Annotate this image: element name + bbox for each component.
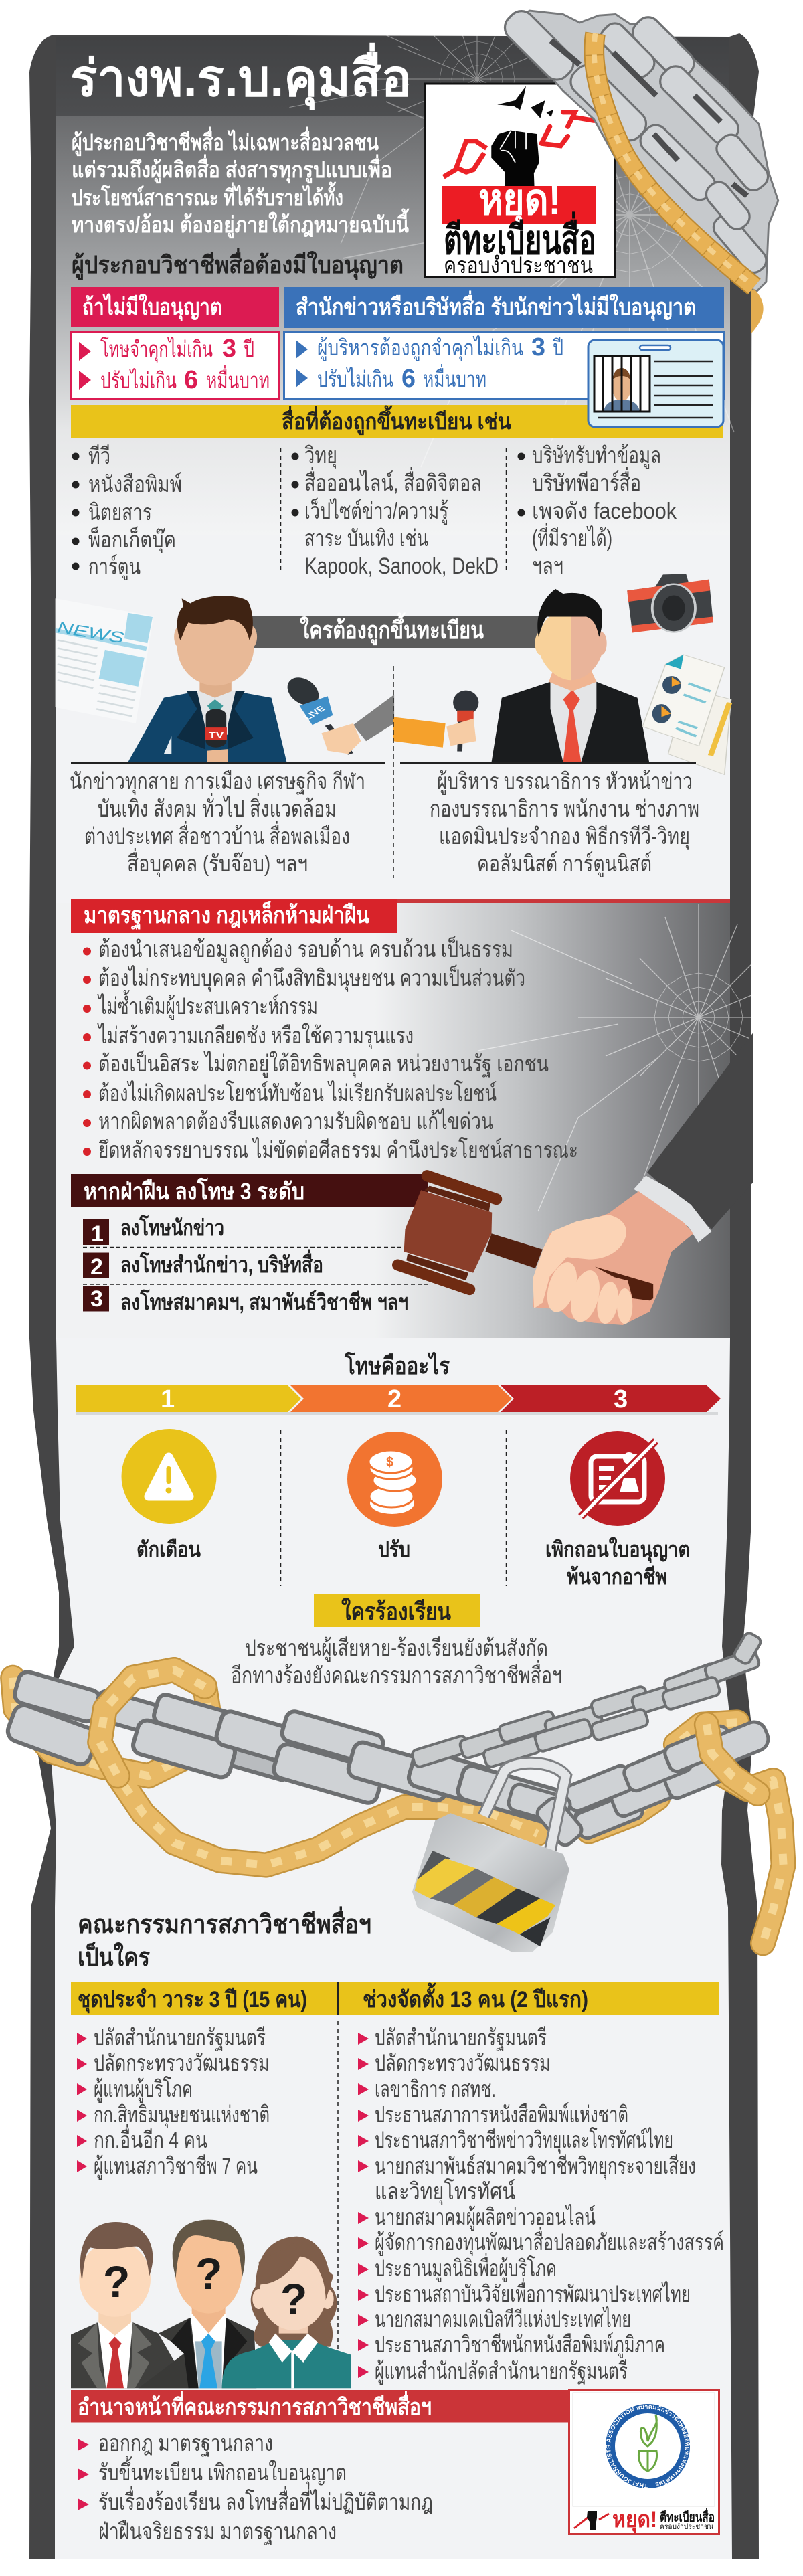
duties list: ฝ่าฝืนจริยธรรม มาตรฐานกลาง <box>98 2519 337 2545</box>
text: who executives <box>430 769 699 877</box>
who can complain: อีกทางร้องยังคณะกรรมการสภาวิชาชีพสื่อฯ <box>231 1660 562 1689</box>
panel upper gradient <box>56 116 730 535</box>
penalty levels list: 1 <box>91 1221 104 1247</box>
yellow bar: media to register: สื่อที่ต้องถูกขึ้นทะเบียน เช่น <box>282 405 511 436</box>
icon: licence revoked <box>570 1431 665 1526</box>
panel: no licence: 6 <box>184 366 198 394</box>
founding members list: ประธานสภาวิชาชีพนักหนังสือพิมพ์ภูมิภาค <box>375 2332 665 2358</box>
permanent members list <box>77 2025 270 2180</box>
panel: agency without licence: หมื่นบาท <box>423 364 486 392</box>
media lists: สื่อออนไลน์, สื่อดิจิตอล <box>304 467 482 496</box>
penalty levels list: ลงโทษนักข่าว <box>120 1215 224 1240</box>
permanent members list: ผู้แทนสภาวิชาชีพ 7 คน <box>94 2154 258 2180</box>
penalty labels: ปรับ <box>378 1537 410 1561</box>
dashed dividers <box>281 1430 506 1586</box>
panel: no licence: หมื่นบาท <box>206 365 270 393</box>
media lists: สาระ บันเทิง เช่น <box>304 526 428 551</box>
founding members list: นายกสมาคมผู้ผลิตข่าวออนไลน์ <box>375 2204 596 2231</box>
text: who executives: กองบรรณาธิการ พนักงาน ช่างภาพ <box>430 796 699 822</box>
cracked glass top <box>289 0 574 244</box>
media lists: บริษัทรับทำข้อมูล <box>532 443 661 469</box>
permanent members list: ปลัดสำนักนายกรัฐมนตรี <box>94 2025 266 2051</box>
grey gradient behind rules section <box>56 903 730 1338</box>
penalty step arrows: 3 <box>614 1385 628 1413</box>
permanent members list: กก.สิทธิมนุษยชนแห่งชาติ <box>94 2102 270 2128</box>
founding members list: ปลัดสำนักนายกรัฐมนตรี <box>375 2025 547 2051</box>
media lists: หนังสือพิมพ์ <box>88 472 182 497</box>
maroon header: three penalty levels: หากฝ่าฝืน ลงโทษ 3 ระดับ <box>84 1177 304 1205</box>
second rope strand over chain <box>100 1670 757 1794</box>
media lists: พ็อกเก็ตบุ๊ค <box>88 526 176 553</box>
founding members list <box>358 2025 724 2385</box>
permanent members list: ผู้แทนผู้บริโภค <box>94 2076 193 2103</box>
penalty levels list: ลงโทษสำนักข่าว, บริษัทสื่อ <box>120 1249 323 1277</box>
illustration: three unknown people <box>71 2220 351 2388</box>
illustration: report documents <box>642 655 731 774</box>
maroon header: three penalty levels <box>71 1174 428 1207</box>
penalty levels list: ลงโทษสมาคมฯ, สมาพันธ์วิชาชีพ ฯลฯ <box>120 1289 408 1314</box>
rules list: ต้องเป็นอิสระ ไม่ตกอยู่ใต้อิทธิพลบุคคล หน่วยงานรัฐ เอกชน <box>98 1050 549 1078</box>
padlock <box>412 1763 569 1952</box>
who must register heading: ใครต้องถูกขึ้นทะเบียน <box>300 612 484 646</box>
text: who executives: ผู้บริหาร บรรณาธิการ หัวหน้าข่าว <box>437 769 693 795</box>
rope around lock <box>13 1670 784 1943</box>
illustration: newspaper: NEWS <box>54 619 128 647</box>
penalty labels <box>137 1537 690 1589</box>
illustration: live microphone <box>282 675 394 754</box>
duties header: อำนาจหน้าที่คณะกรรมการสภาวิชาชีพสื่อฯ <box>78 2391 432 2420</box>
rules list: ไม่ซ้ำเติมผู้ประสบเคราะห์กรรม <box>97 990 318 1020</box>
who can complain: ใครร้องเรียน <box>341 1597 451 1625</box>
founding members list: ประธานสภาการหนังสือพิมพ์แห่งชาติ <box>375 2102 628 2128</box>
licence heading: ผู้ประกอบวิชาชีพสื่อต้องมีใบอนุญาต <box>72 248 404 280</box>
intro paragraph <box>72 126 410 239</box>
who can complain <box>231 1594 562 1689</box>
rules list: ยึดหลักจรรยาบรรณ ไม่ขัดต่อศีลธรรม คำนึงประโยชน์สาธารณะ <box>98 1137 578 1163</box>
reporter and executive divider lines <box>71 762 696 764</box>
duties list <box>78 2431 433 2545</box>
text: who reporters: นักข่าวทุกสาย การเมือง เศรษฐกิจ กีฬา <box>70 769 365 795</box>
text: who reporters: สื่อบุคคล (รับจ๊อบ) ฯลฯ <box>127 848 308 877</box>
penalty levels list: 2 <box>90 1254 103 1280</box>
media lists: วิทยุ <box>304 443 337 469</box>
illustration: newspaper <box>54 598 154 723</box>
icon: warning <box>122 1429 217 1524</box>
text: who reporters: บันเทิง สังคม ทั่วไป สิ่งแวดล้อม <box>98 793 337 822</box>
panel: no licence: ปรับไม่เกิน <box>100 368 177 393</box>
panel: agency without licence: 6 <box>402 365 416 393</box>
panel: no licence: 3 <box>222 335 236 363</box>
permanent members list: กก.อื่นอีก 4 คน <box>94 2124 207 2153</box>
rules list: ไม่สร้างความเกลียดชัง หรือใช้ความรุนแรง <box>97 1023 414 1049</box>
media lists: เว็ปไซต์ข่าว/ความรู้ <box>304 497 448 525</box>
duties list: ออกกฎ มาตรฐานกลาง <box>98 2431 273 2457</box>
panel: no licence <box>71 287 279 399</box>
dashed divider <box>337 2021 339 2349</box>
poster: stop media registration: ตีทะเบียนสื่อ <box>444 211 596 262</box>
penalty levels list <box>83 1215 428 1314</box>
icon: coins <box>347 1432 442 1527</box>
mini stop logo: ตีทะเบียนสื่อ <box>660 2507 715 2525</box>
who can complain: ประชาชนผู้เสียหาย-ร้องเรียนยังต้นสังกัด <box>245 1636 548 1662</box>
permanent members list: ปลัดกระทรวงวัฒนธรรม <box>94 2051 270 2076</box>
duties header <box>71 2390 569 2423</box>
panel: no licence: ปี <box>243 337 254 361</box>
red header: central standards <box>71 899 730 933</box>
media lists: การ์ตูน <box>88 554 141 580</box>
panel: agency without licence: ปี <box>552 335 563 360</box>
illustration: TV reporter: TV <box>209 730 224 740</box>
illustration: camera <box>627 574 713 632</box>
media lists <box>72 443 677 580</box>
rules list: ต้องไม่เกิดผลประโยชน์ทับซ้อน ไม่เรียกรับผลประโยชน์ <box>98 1080 497 1106</box>
illustration: sleeve and hand <box>485 1033 753 1325</box>
panel: no licence: ถ้าไม่มีใบอนุญาต <box>82 293 222 321</box>
cracked glass upper right <box>343 67 778 467</box>
intro paragraph: แต่รวมถึงผู้ผลิตสื่อ ส่งสารทุกรูปแบบเพื่อ <box>72 154 392 184</box>
panel: no licence: โทษจำคุกไม่เกิน <box>100 337 213 363</box>
title band top gradient <box>56 37 729 117</box>
rules list: ต้องนำเสนอข้อมูลถูกต้อง รอบด้าน ครบถ้วน เป็นธรรม <box>98 936 513 963</box>
media lists: (ที่มีรายได้) <box>532 523 612 551</box>
media lists: ฯลฯ <box>532 553 563 579</box>
rope top right <box>594 33 764 333</box>
penalty levels list: 3 <box>90 1286 103 1312</box>
chain: left run <box>5 1670 582 1830</box>
panel: agency without licence: ปรับไม่เกิน <box>317 367 393 392</box>
panel: agency without licence <box>284 287 724 399</box>
committee heading <box>78 1906 371 1972</box>
text: who reporters: ต่างประเทศ สื่อชาวบ้าน สื่อพลเมือง <box>84 821 350 849</box>
penalties heading: โทษคืออะไร <box>344 1351 450 1379</box>
duties list: รับขึ้นทะเบียน เพิกถอนใบอนุญาต <box>98 2456 347 2486</box>
media lists: ทีวี <box>88 444 110 469</box>
poster: stop media registration <box>425 84 615 278</box>
rules list: หากผิดพลาดต้องรีบแสดงความรับผิดชอบ แก้ไขด่วน <box>98 1108 493 1134</box>
mini stop logo: ครอบงำประชาชน <box>660 2523 713 2531</box>
mini stop logo: หยุด! <box>612 2507 657 2534</box>
founding members list: ประธานสภาวิชาชีพข่าววิทยุและโทรทัศน์ไทย <box>375 2127 673 2154</box>
penalty step arrows: 2 <box>387 1385 402 1413</box>
committee heading: คณะกรรมการสภาวิชาชีพสื่อฯ <box>78 1906 371 1939</box>
penalty step arrows: 1 <box>161 1385 175 1413</box>
founding members list: นายกสมาคมเคเบิลทีวีแห่งประเทศไทย <box>375 2306 631 2332</box>
illustration: live microphone: LIVE <box>301 705 328 721</box>
founding members list: ประธานมูลนิธิเพื่อผู้บริโภค <box>375 2253 557 2282</box>
dashed divider <box>393 666 394 878</box>
founding members list: ปลัดกระทรวงวัฒนธรรม <box>375 2051 551 2076</box>
committee table header: ชุดประจำ วาระ 3 ปี (15 คน) <box>78 1987 307 2014</box>
intro paragraph: ผู้ประกอบวิชาชีพสื่อ ไม่เฉพาะสื่อมวลชน <box>72 126 379 157</box>
committee table header <box>71 1982 719 2015</box>
red header: central standards: มาตรฐานกลาง กฎเหล็กห้ามฝ่าฝืน <box>84 900 369 930</box>
text: who executives: แอดมินประจำกอง พิธีกรทีวี-วิทยุ <box>439 824 690 850</box>
illustration: three unknown people: ? <box>103 2257 130 2306</box>
cracked glass right <box>478 904 803 1211</box>
icon: coins: $ <box>386 1455 393 1470</box>
penalty labels: พ้นจากอาชีพ <box>567 1565 667 1589</box>
intro paragraph: ประโยชน์สาธารณะ ที่ได้รับรายได้ทั้ง <box>72 181 343 210</box>
duties list: รับเรื่องร้องเรียน ลงโทษสื่อที่ไม่ปฏิบัติตามกฎ <box>98 2486 433 2515</box>
panel: agency without licence: ผู้บริหารต้องถูกจำคุกไม่เกิน <box>317 335 523 361</box>
illustration: gavel <box>398 1176 497 1290</box>
penalty labels: เพิกถอนใบอนุญาต <box>545 1537 690 1563</box>
founding members list: เลขาธิการ กสทช. <box>375 2077 496 2102</box>
text: who reporters <box>70 769 365 877</box>
media lists: นิตยสาร <box>88 500 152 525</box>
chain and rope top right <box>499 6 778 292</box>
text: who executives: คอลัมนิสต์ การ์ตูนนิสต์ <box>477 851 652 877</box>
chain: upper right run <box>411 1631 762 1768</box>
committee heading: เป็นใคร <box>78 1942 150 1972</box>
illustration: three unknown people: ? <box>195 2249 222 2298</box>
founding members list: ผู้แทนสำนักปลัดสำนักนายกรัฐมนตรี <box>375 2358 628 2385</box>
logo box <box>568 2389 720 2535</box>
title: ร่างพ.ร.บ.คุมสื่อ <box>70 42 412 110</box>
yellow bar: media to register <box>71 405 723 438</box>
media lists: บริษัทพีอาร์สื่อ <box>532 467 641 496</box>
illustration: TV reporter <box>128 596 286 762</box>
penalty step arrows <box>76 1385 721 1415</box>
icon: fist breaking chain <box>444 86 594 187</box>
mini stop logo <box>574 2507 715 2534</box>
panel: agency without licence: 3 <box>531 333 545 361</box>
icon: journalist association seal: THAI JOURNALISTS ASSOCIATION สมาคมนักข่าวนักหนังสือพิมพ์แห่งประเทศไทย <box>606 2405 690 2488</box>
icon: ID card with jailed person <box>588 340 723 427</box>
illustration: three unknown people: ? <box>280 2274 307 2324</box>
poster: stop media registration: ครอบงำประชาชน <box>444 253 593 278</box>
founding members list: และวิทยุโทรทัศน์ <box>375 2178 515 2205</box>
illustration: executive <box>393 589 649 762</box>
who must register heading <box>248 612 542 648</box>
penalty labels: ตักเตือน <box>137 1537 201 1561</box>
poster: stop media registration: หยุด! <box>478 175 561 226</box>
rules list: ต้องไม่กระทบบุคคล คำนึงสิทธิมนุษยชน ความเป็นส่วนตัว <box>98 964 525 992</box>
media lists: เพจดัง facebook <box>532 499 677 524</box>
intro paragraph: ทางตรง/อ้อม ต้องอยู่ภายใต้กฎหมายฉบับนี้ <box>72 208 410 239</box>
panel: agency without licence: สำนักข่าวหรือบริษัทสื่อ รับนักข่าวไม่มีใบอนุญาต <box>296 290 696 321</box>
committee table header: ช่วงจัดตั้ง 13 คน (2 ปีแรก) <box>363 1982 588 2012</box>
chain: lower right run <box>507 1719 772 1849</box>
media lists: Kapook, Sanook, DekD <box>304 553 499 579</box>
rules list <box>83 936 578 1163</box>
